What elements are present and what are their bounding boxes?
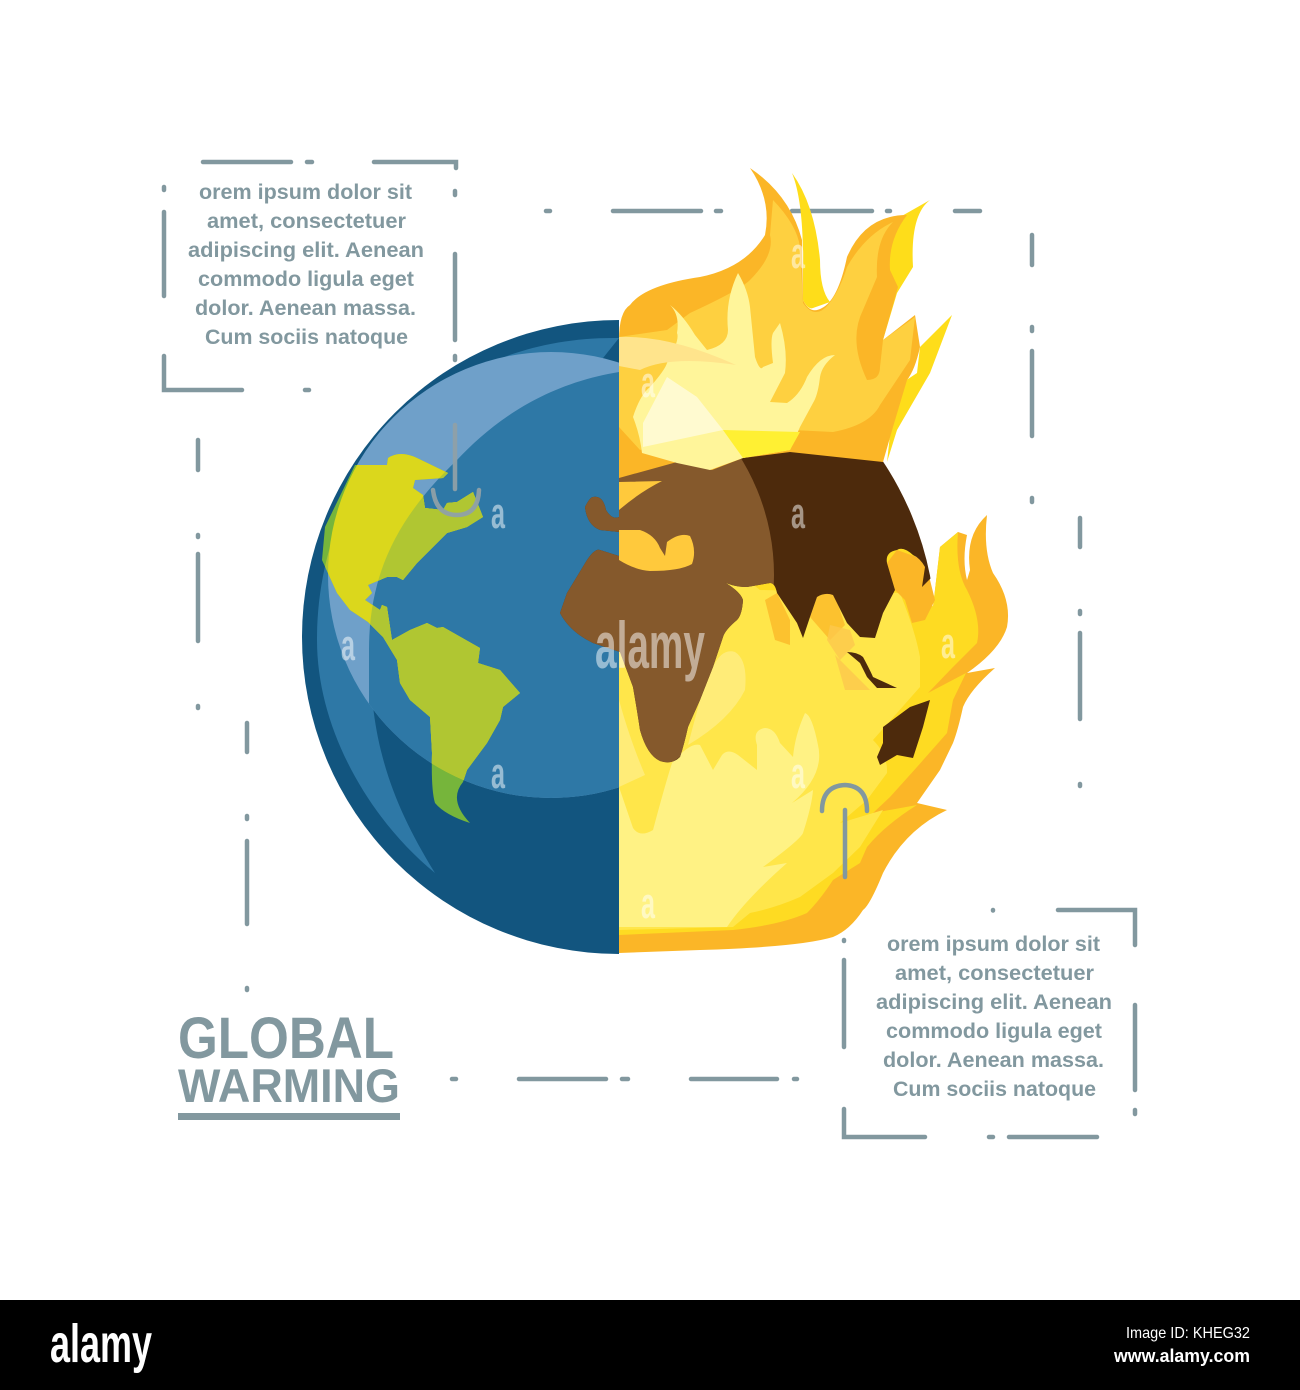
footer bar: alamy — [0, 1300, 1300, 1390]
upper flames: tall yellow tongue — [792, 173, 830, 308]
text block: orem ipsum dolor sit — [887, 933, 1100, 956]
dashed border — [844, 910, 1135, 1137]
text block: dolor. Aenean massa. — [883, 1049, 1104, 1072]
lower flames — [619, 470, 1008, 953]
upper flames: back yellow tongues — [875, 200, 952, 462]
panel: bottom-right text box — [844, 910, 1135, 1137]
upper flames: inner amber — [619, 200, 915, 450]
continent: Eurasia and Africa, scorched — [560, 452, 930, 762]
text block: Cum sociis natoque — [205, 326, 408, 349]
watermark: a — [791, 489, 805, 538]
text block: amet, consectetuer — [895, 962, 1094, 985]
continent: the Americas — [322, 454, 520, 823]
seas showing fire — [619, 481, 694, 571]
connector: hook on the flames — [822, 785, 867, 941]
text block — [188, 181, 424, 349]
dashed frame: main square — [198, 211, 1080, 1079]
text block: dolor. Aenean massa. — [195, 297, 416, 320]
watermark: a — [341, 621, 355, 670]
title: Global Warming: WARMING — [178, 1059, 400, 1112]
watermark: a — [941, 619, 955, 668]
watermark: a — [791, 749, 805, 798]
footer url: www.alamy.com — [1113, 1346, 1250, 1366]
islands: Japan and Australia — [847, 652, 930, 765]
title: Global Warming — [178, 1006, 400, 1120]
text block: amet, consectetuer — [207, 210, 406, 233]
connector: hook at North America — [433, 425, 479, 515]
illustration: half blue earth, half burning earth — [302, 168, 1008, 954]
watermark: a — [791, 229, 805, 278]
upper flames: outer orange — [619, 168, 920, 478]
text block: adipiscing elit. Aenean — [188, 239, 424, 262]
title: Global Warming: GLOBAL — [178, 1006, 394, 1071]
watermark: alamy — [595, 608, 705, 682]
text block: commodo ligula eget — [886, 1020, 1102, 1043]
panel: top-left text box — [164, 162, 456, 390]
watermark: a — [491, 489, 505, 538]
text block — [876, 933, 1112, 1101]
upper flames: pale core — [633, 273, 835, 470]
watermark: a — [491, 749, 505, 798]
text block: orem ipsum dolor sit — [199, 181, 412, 204]
watermark: a — [641, 879, 655, 928]
watermark: a — [641, 358, 655, 407]
watermark — [341, 229, 955, 928]
dashed border — [164, 162, 456, 390]
upper flames: bright base and pale highlights — [723, 430, 800, 458]
footer logo: alamy — [50, 1314, 152, 1374]
text block: commodo ligula eget — [198, 268, 414, 291]
globe: blue hemisphere — [302, 320, 619, 954]
footer image id: Image ID: KHEG32 — [1126, 1325, 1250, 1342]
text block: adipiscing elit. Aenean — [876, 991, 1112, 1014]
text block: Cum sociis natoque — [893, 1078, 1096, 1101]
